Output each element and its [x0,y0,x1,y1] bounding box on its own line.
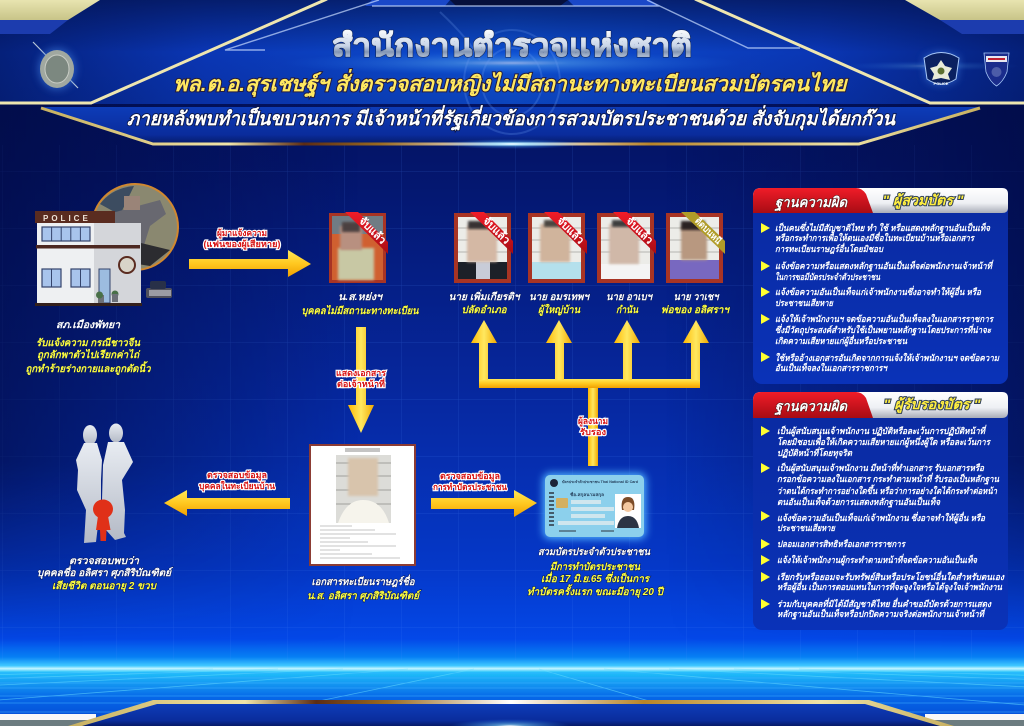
caption: officials [448,289,730,316]
photo: father of registrant: ติดบนหนี [692,215,724,247]
offence list [777,424,1005,620]
arrow: station to suspect [189,228,311,277]
offence list: ปฏิบัติหน้าที่โดยทุจริต [777,446,853,459]
offence list: ปลอมเอกสารสิทธิหรือเอกสารราชการ [777,539,906,549]
arrow: station to suspect: ผู้มาแจ้งความ [217,228,267,239]
panel header: ฐานความผิด [774,194,848,212]
panel header [753,188,1008,213]
photo: sub-district head: จับแล้ว [623,214,656,247]
offence list: เรียกรับหรือยอมจะรับทรัพย์สินหรือประโยชน์อื่นใดสำหรับตนเอง [777,570,1005,582]
icon: police station with victim photo [35,183,179,306]
panel: offences of card certifier [753,392,1008,630]
arrow: station to suspect: (แฟนของผู้เสียหาย) [204,239,281,250]
icon: police station with victim photo: POLICE [43,214,91,223]
icon: shield badge [984,53,1009,86]
icon: family silhouette [76,424,133,543]
caption: id card: ทำบัตรครั้งแรก ขณะมีอายุ 20 ปี [527,584,665,598]
offence list: ซึ่งมีวัตถุประสงค์สำหรับใช้เป็นพยานหลักฐานโดยประการที่น่าจะ [775,323,992,336]
offence list: หรือกระทำการเพื่อให้ตนเองมีชื่อในทะเบียนบ้านหรือเอกสาร [775,231,975,243]
photo: village head: จับแล้ว [554,214,587,247]
offence list: ร่วมกับบุคคลที่มิได้มีสัญชาติไทย ยื่นคำขอมีบัตรด้วยการแสดง [777,597,992,610]
bullets [761,223,770,362]
title: สำนักงานตำรวจแห่งชาติ [332,28,692,63]
photo: sub-district head [597,212,656,283]
caption: family check result: บุคคลชื่อ อลิศรา ศุภสิริบัณฑิตย์ [37,565,174,579]
icon: police badge [923,52,960,86]
photo: father of registrant [666,212,725,283]
caption: registration document [307,574,422,602]
icon: police badge: POLICE [934,81,949,86]
offence list: แจ้งข้อความอันเป็นเท็จแก่เจ้าพนักงานซึ่งอาจทำให้ผู้อื่น หรือ [775,285,982,298]
arrow: branching to four officials: ผู้ลงนาม [578,416,608,427]
caption: police station: สภ.เมืองพัทยา [56,319,121,331]
document: civil registration [309,444,416,566]
caption: id card: เมื่อ 17 มิ.ย.65 ซึ่งเป็นการ [541,571,651,585]
arrow: document to id card [431,471,537,517]
offence list: แจ้งให้เจ้าพนักงานฯ จดข้อความอันเป็นเท็จลงในเอกสารราชการ [775,313,994,324]
subtitle: พล.ต.อ.สุรเชษฐ์ฯ สั่งตรวจสอบหญิงไม่มีสถานะทางทะเบียนสวมบัตรคนไทย [174,69,848,98]
panel header [753,392,1008,418]
caption: registration document: เอกสารทะเบียนราษฎร์ชื่อ [312,574,415,588]
icon: national id card: บัตรประจำตัวประชาชน Thai National ID Card [562,479,638,484]
watermark: police emblem [440,12,560,134]
offence list: เกิดความเสียหายแก่ผู้อื่นหรือประชาชน [775,334,908,347]
arrow: document to family check [164,470,290,516]
caption: id card: สวมบัตรประจำตัวประชาชน [538,546,651,558]
offence list: เป็นผู้สนับสนุนเจ้าพนักงาน ปฏิบัติหรือละเว้นการปฏิบัติหน้าที่ [777,424,987,437]
caption: family check result [37,556,174,592]
offence list: หรือผู้อื่น เป็นการตอบแทนในการที่จะจูงใจหรือได้จูงใจเจ้าพนักงาน [777,580,1003,593]
panel header: ฐานความผิด [774,398,848,416]
arrow: document to family check: ตรวจสอบข้อมูล [207,470,267,481]
icon: police seal [33,42,78,90]
offence list: ประชาชนเสียหาย [777,523,836,533]
offence list: โดยมิชอบเพื่อให้เกิดความเสียหายแก่ผู้หนึ่งผู้ใด หรือละเว้นการ [777,435,991,448]
caption: officials: ผู้ใหญ่บ้าน [538,303,581,316]
offence list: อันเป็นเท็จลงในเอกสารราชการฯ [775,362,888,373]
offence list: หลักฐานอันเป็นเท็จหรือปกปิดความจริงต่อพนักงานเจ้าหน้าที่ [777,607,986,620]
photo: woman suspect: จับแล้ว [356,214,389,247]
offence list: การทะเบียนราษฎร์อื่นโดยมิชอบ [775,242,884,254]
arrow: suspect to document: แสดงเอกสาร [336,368,386,378]
caption: family check result: ตรวจสอบพบว่า [69,556,140,567]
bullets [761,426,770,609]
icon: national id card: ชื่อ-สกุลนามสกุล [570,491,605,498]
offence list: แจ้งให้เจ้าพนักงานผู้กระทำตามหน้าที่จดข้อความอันเป็นเท็จ [777,553,978,566]
caption: registration document: น.ส. อลิศรา ศุภสิริบัณฑิตย์ [307,590,422,602]
icon: national id card [543,473,646,539]
photo: village head [528,212,587,283]
arrow: document to id card: การทำบัตรประชาชน [433,482,507,492]
arrow: suspect to document [336,327,386,433]
caption: officials: นาย เพิ่มเกียรติฯ [448,289,521,303]
panel: offences of card impersonator [753,188,1008,384]
arrow: branching to four officials: รับรอง [580,427,606,437]
caption: police station: ถูกทำร้ายร่างกายและถูกตัดนิ้ว [26,361,152,375]
arrow: document to id card: ตรวจสอบข้อมูล [440,471,500,482]
caption: family check result: เสียชีวิต ตอนอายุ 2 ขวบ [52,580,158,592]
arrow: suspect to document: ต่อเจ้าหน้าที่ [337,377,385,389]
caption: police station: ถูกลักพาตัวไปเรียกค่าไถ่ [37,348,141,361]
offence list: เป็นผู้สนับสนุนเจ้าพนักงาน มีหน้าที่ทำเอกสาร รับเอกสารหรือ [777,461,985,474]
bottom frame [0,700,1024,726]
panel header: " ผู้สวมบัตร " [882,192,964,209]
caption: officials: นาย อาเบฯ [606,292,653,303]
offence list: ใช้หรืออ้างเอกสารอันเกิดจากการแจ้งให้เจ้าพนักงานฯ จดข้อความ [775,352,1000,363]
panel header: " ผู้รับรองบัตร " [884,396,981,413]
caption: woman suspect [302,292,420,317]
offence list [775,221,1000,373]
header banner [0,0,1024,149]
caption: woman suspect: บุคคลไม่มีสถานะทางทะเบียน [302,304,420,317]
caption: police station: รับแจ้งความ กรณีชาวจีน [36,337,141,349]
caption: officials: กำนัน [616,304,639,316]
offence list: ประชาชนเสียหาย [775,298,834,308]
photo: woman suspect [329,212,389,283]
offence list: เป็นคนซึ่งไม่มีสัญชาติไทย ทำ ใช้ หรือแสดงหลักฐานอันเป็นเท็จ [775,221,991,234]
offence list: แจ้งข้อความอันเป็นเท็จแก่เจ้าพนักงาน ซึ่งอาจทำให้ผู้อื่น หรือ [777,511,986,524]
offence list: ตนอันเป็นเท็จด้วยการแสดงหลักฐานอันเป็นเท็จ [777,496,941,508]
offence list: กรอกข้อความลงในเอกสาร กระทำตามหน้าที่ รับรองเป็นหลักฐาน [777,472,1000,485]
caption: officials: พ่อของ อลิศราฯ [661,304,730,316]
sub-heading: ภายหลังพบทำเป็นขบวนการ มีเจ้าหน้าที่รัฐเกี่ยวข้องการสวมบัตรประชาชนด้วย สั่งจับกุมได้ยกก๊วน [127,105,896,131]
caption: woman suspect: น.ส.หย่งฯ [338,292,383,303]
caption: police station [26,319,152,375]
caption: officials: นาย อมรเทพฯ [529,292,590,303]
arrow: branching to four officials [471,320,709,466]
caption: id card: มีการทำบัตรประชาชน [550,561,641,573]
offence list: ว่าตนได้กระทำการอย่างใดขึ้น หรือว่าการอย่างใดได้กระทำต่อหน้า [777,484,998,496]
offence list: แจ้งข้อความหรือแสดงหลักฐานอันเป็นเท็จต่อพนักงานเจ้าหน้าที่ [775,259,994,272]
photo: district clerk: จับแล้ว [480,214,513,247]
caption: officials: ปลัดอำเภอ [462,304,507,316]
offence list: ในการขอมีบัตรประจำตัวประชาชน [775,271,881,282]
photo: district clerk [454,212,513,283]
caption: id card [527,546,665,598]
caption: officials: นาย วาเชฯ [674,292,720,303]
arrow: document to family check: บุคคลในทะเบียนบ้าน [199,480,275,492]
